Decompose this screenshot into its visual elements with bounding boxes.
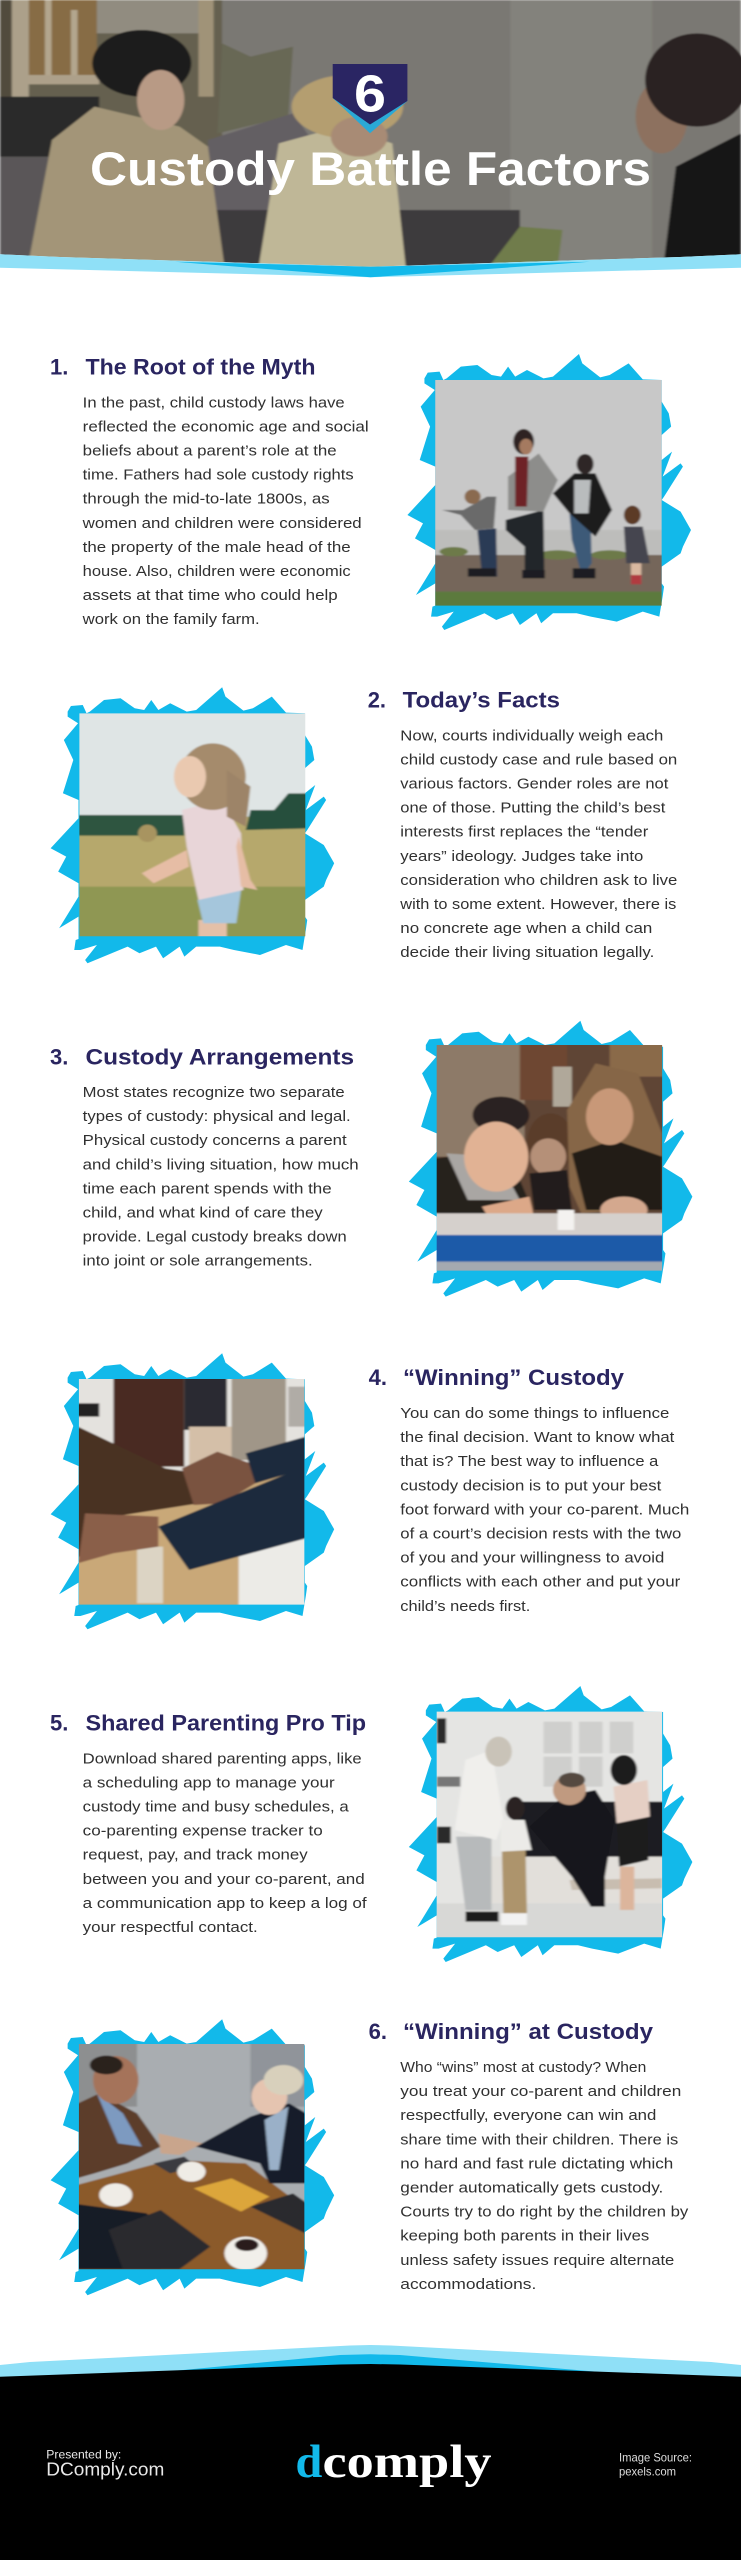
photo: girl running through a field xyxy=(79,713,306,936)
body text 2: one of those. Putting the child’s best xyxy=(400,800,666,817)
footer xyxy=(0,2345,741,2560)
footer wave: light band xyxy=(0,2345,741,2380)
blue paint splash 4 xyxy=(51,1353,334,1629)
body text 4: foot forward with your co-parent. Much xyxy=(400,1501,689,1518)
body text 4: child’s needs first. xyxy=(400,1598,530,1615)
heading 4: “Winning” Custody xyxy=(403,1365,625,1390)
body text 3: time each parent spends with the xyxy=(83,1180,332,1197)
body text 5: request, pay, and track money xyxy=(83,1847,308,1864)
body text 2: Now, courts individually weigh each xyxy=(400,727,663,744)
body text 6: unless safety issues require alternate xyxy=(400,2252,674,2269)
heading 3: Custody Arrangements xyxy=(86,1044,354,1069)
body text 6: respectfully, everyone can win and xyxy=(400,2107,656,2124)
body text 6: keeping both parents in their lives xyxy=(400,2228,649,2245)
body text 6: you treat your co-parent and children xyxy=(400,2083,681,2100)
blue paint splash 5 xyxy=(409,1686,692,1962)
body text 1: beliefs about a parent’s role at the xyxy=(83,442,337,460)
body text 6: share time with their children. There is xyxy=(400,2131,678,2148)
body text 4: that is? The best way to influence a xyxy=(400,1453,659,1470)
photo: reassuring handshake xyxy=(78,1379,304,1605)
body text 5: between you and your co-parent, and xyxy=(83,1871,365,1888)
header wave: bright wedge xyxy=(175,262,590,277)
heading 2: Today’s Facts xyxy=(403,688,560,713)
footer wave: bright wedge xyxy=(165,2354,600,2380)
image source credit xyxy=(619,2451,692,2479)
blue paint splash 2 xyxy=(51,687,334,963)
body text 4 xyxy=(400,1405,689,1615)
heading 1: 1. xyxy=(50,354,68,379)
header xyxy=(0,0,741,280)
body text 6 xyxy=(400,2059,689,2293)
section 4 xyxy=(51,1353,689,1629)
section 1 xyxy=(50,354,691,630)
body text 6: Courts try to do right by the children by xyxy=(400,2204,689,2221)
heading 1: The Root of the Myth xyxy=(86,354,316,379)
body text 1: assets at that time who could help xyxy=(83,587,338,604)
body text 1: through the mid-to-late 1800s, as xyxy=(83,491,330,508)
photo: grandparents greeting a child in a living room xyxy=(436,1712,662,1938)
section 5 xyxy=(50,1686,692,1962)
body text 4: custody decision is to put your best xyxy=(400,1477,662,1494)
body text 2: child custody case and rule based on xyxy=(400,751,677,768)
heading 3: 3. xyxy=(50,1044,68,1069)
body text 6: Who “wins” most at custody? When xyxy=(400,2059,646,2076)
blue paint splash 3 xyxy=(409,1021,692,1297)
dcomply logo: d xyxy=(295,2436,322,2488)
section 3 xyxy=(50,1021,692,1297)
heading 6: “Winning” at Custody xyxy=(403,2019,654,2044)
body text 4: You can do some things to influence xyxy=(400,1405,669,1422)
body text 4: the final decision. Want to know what xyxy=(400,1429,675,1446)
body text 5 xyxy=(83,1750,368,1936)
photo: family walking hand in hand xyxy=(435,380,662,606)
photo: family doing a craft at a table xyxy=(436,1045,662,1271)
section 6 xyxy=(51,2019,689,2295)
image source credit: pexels.com xyxy=(619,2465,676,2479)
body text 1: In the past, child custody laws have xyxy=(83,394,345,411)
presented by credit xyxy=(46,2447,164,2480)
body text 1 xyxy=(82,394,369,628)
heading 5: Shared Parenting Pro Tip xyxy=(86,1711,366,1736)
body text 4: of a court’s decision rests with the two xyxy=(400,1526,681,1542)
blue paint splash 6 xyxy=(51,2019,334,2295)
body text 2: various factors. Gender roles are not xyxy=(400,776,669,792)
image source credit: Image Source: xyxy=(619,2451,692,2465)
body text 5: custody time and busy schedules, a xyxy=(83,1798,349,1816)
dcomply logo: comply xyxy=(322,2436,492,2488)
body text 1: reflected the economic age and social xyxy=(83,418,369,435)
body text 3: provide. Legal custody breaks down xyxy=(83,1229,347,1246)
body text 6: gender automatically gets custody. xyxy=(400,2180,663,2196)
header photo: parents in counselling session xyxy=(0,0,741,280)
body text 1: time. Fathers had sole custody rights xyxy=(83,467,354,484)
presented by credit: DComply.com xyxy=(46,2460,164,2480)
blue paint splash 1 xyxy=(407,354,691,630)
body text 3: Most states recognize two separate xyxy=(83,1084,345,1101)
heading 6: 6. xyxy=(369,2019,387,2044)
body text 2: decide their living situation legally. xyxy=(400,944,654,961)
heading 2: 2. xyxy=(368,688,386,713)
photo: business handshake over a table xyxy=(71,2040,312,2273)
header wave: light band xyxy=(0,254,741,277)
body text 2: consideration who children ask to live xyxy=(400,872,677,889)
body text 5: Download shared parenting apps, like xyxy=(83,1750,362,1767)
badge xyxy=(333,64,407,133)
body text 4: of you and your willingness to avoid xyxy=(400,1550,664,1567)
body text 2: interests first replaces the “tender xyxy=(400,824,648,841)
title: Custody Battle Factors xyxy=(90,142,651,195)
presented by credit: Presented by: xyxy=(46,2447,121,2461)
body text 6: no hard and fast rule dictating which xyxy=(400,2155,673,2172)
body text 2: years” ideology. Judges take into xyxy=(400,848,643,865)
section 2 xyxy=(51,687,677,963)
body text 3: and child’s living situation, how much xyxy=(83,1156,359,1173)
body text 5: a scheduling app to manage your xyxy=(83,1774,335,1791)
badge: 6 xyxy=(354,66,386,124)
body text 3: child, and what kind of care they xyxy=(83,1204,323,1222)
heading 4: 4. xyxy=(369,1365,387,1390)
body text 6: accommodations. xyxy=(400,2276,536,2293)
body text 2: with to some extent. However, there is xyxy=(399,896,676,913)
body text 1: house. Also, children were economic xyxy=(83,563,351,580)
body text 5: your respectful contact. xyxy=(83,1919,258,1936)
body text 2: no concrete age when a child can xyxy=(400,920,652,937)
heading 5: 5. xyxy=(50,1711,68,1736)
body text 1: work on the family farm. xyxy=(82,611,260,628)
body text 2 xyxy=(399,727,677,961)
body text 3: into joint or sole arrangements. xyxy=(83,1253,313,1270)
body text 1: the property of the male head of the xyxy=(83,539,351,556)
body text 3 xyxy=(83,1084,359,1270)
footer black panel xyxy=(0,2364,741,2560)
body text 5: a communication app to keep a log of xyxy=(83,1895,368,1912)
body text 5: co-parenting expense tracker to xyxy=(83,1823,323,1840)
body text 3: types of custody: physical and legal. xyxy=(83,1108,351,1125)
body text 4: conflicts with each other and put your xyxy=(400,1574,680,1591)
body text 1: women and children were considered xyxy=(82,515,362,532)
body text 3: Physical custody concerns a parent xyxy=(83,1132,348,1149)
